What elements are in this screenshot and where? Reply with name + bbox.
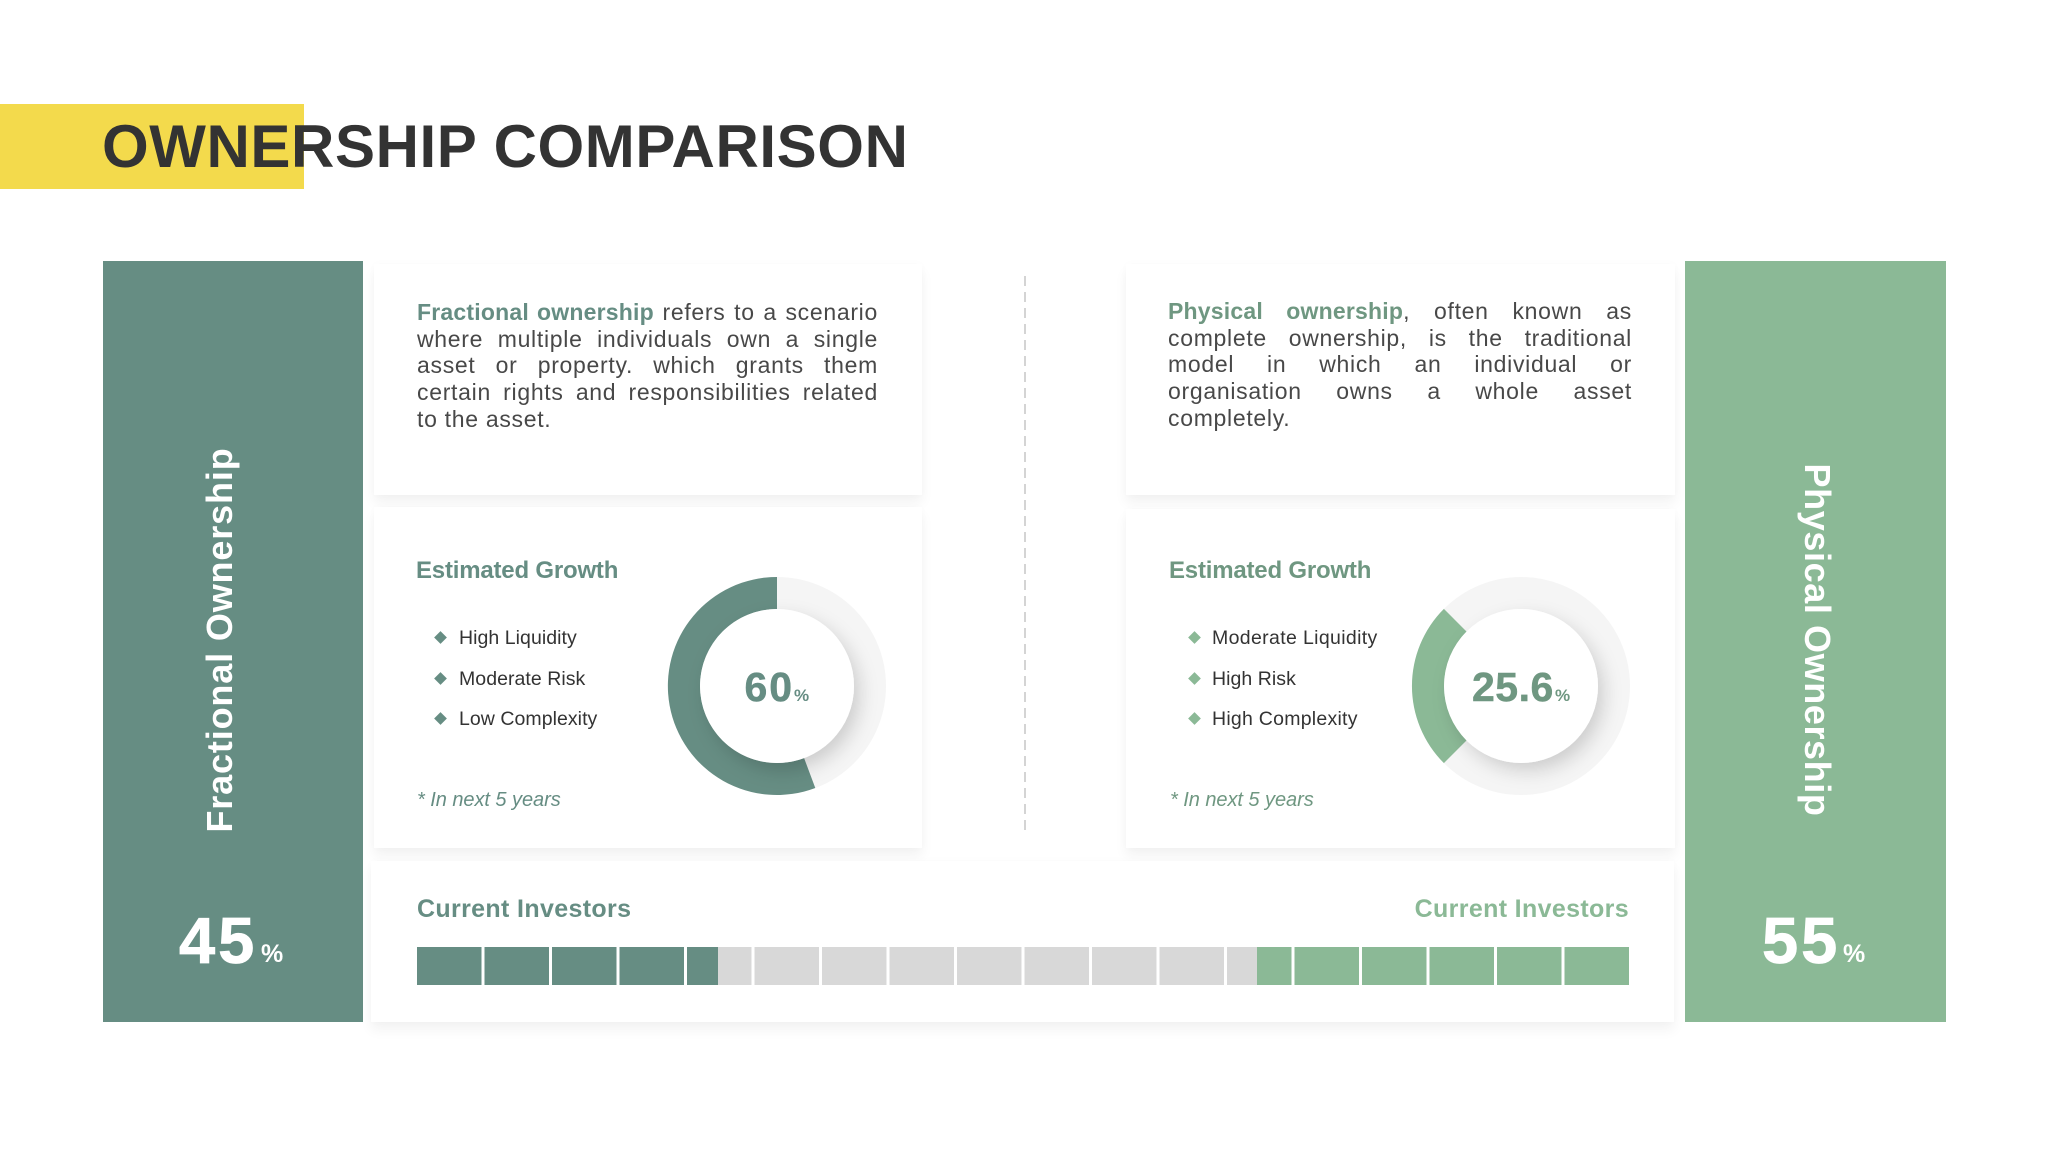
text: fractional ownership description: Fractional ownership refers to a scenario <box>417 299 878 325</box>
title: OWNERSHIP COMPARISON <box>102 113 909 180</box>
footnote: physical: * In next 5 years <box>1170 789 1314 811</box>
footnote: fractional: * In next 5 years <box>417 789 561 811</box>
bullet: high risk: High Risk <box>1212 668 1296 690</box>
panel: fractional ownership description <box>374 264 922 495</box>
list: physical attributes <box>1188 626 1378 730</box>
bullet: moderate liquidity: Moderate Liquidity <box>1212 626 1378 648</box>
text: physical ownership description: completely. <box>1168 405 1290 431</box>
text: fractional ownership description: certain rights and responsibilities related <box>417 379 878 405</box>
panel: fractional ownership side bar <box>103 261 363 1022</box>
stat: 55 percent: % <box>1843 940 1865 968</box>
fractional segments <box>417 947 718 985</box>
physical segments <box>1257 947 1629 985</box>
text: fractional ownership description: where multiple individuals own a single <box>417 326 878 352</box>
bullet: moderate risk: Moderate Risk <box>459 668 585 690</box>
donut chart: 25.6 percent: % <box>1555 686 1570 705</box>
panel: physical estimated growth <box>1126 509 1675 848</box>
vertical label: Physical Ownership: Physical Ownership <box>1797 464 1838 816</box>
text: fractional ownership description <box>417 299 878 432</box>
bullet: high complexity: High Complexity <box>1212 708 1358 730</box>
text: physical ownership description <box>1168 298 1632 431</box>
text: fractional ownership description: to the asset. <box>417 406 551 432</box>
donut chart: 60 percent <box>668 577 886 795</box>
heading: current investors physical: Current Investors <box>1415 895 1629 923</box>
text: physical ownership description: model in which an individual or <box>1168 351 1632 377</box>
panel: current investors <box>371 861 1674 1022</box>
bullet: high liquidity: High Liquidity <box>459 626 577 648</box>
heading: fractional estimated growth: Estimated Growth <box>416 557 618 584</box>
panel: fractional estimated growth <box>374 507 922 848</box>
panel: physical ownership side bar <box>1685 261 1946 1022</box>
heading: current investors fractional: Current Investors <box>417 895 631 923</box>
text: physical ownership description: complete ownership, is the traditional <box>1168 325 1632 351</box>
donut chart: 25.6 percent: 25.6 <box>1472 664 1554 710</box>
segmented bar: investor share <box>417 947 1629 985</box>
text: fractional ownership description: asset or property. which grants them <box>417 352 878 378</box>
divider: dashed centre line <box>1024 276 1026 830</box>
text: physical ownership description: organisation owns a whole asset <box>1168 378 1632 404</box>
text: physical ownership description: Physical ownership, often known as <box>1168 298 1632 324</box>
donut chart: 25.6 percent <box>1412 577 1630 795</box>
donut chart: 60 percent: 60 <box>744 664 794 710</box>
yellow title accent block <box>0 104 304 189</box>
stat: 45 percent: % <box>261 940 283 968</box>
heading: physical estimated growth: Estimated Growth <box>1169 557 1371 584</box>
panel: physical ownership description <box>1126 264 1675 495</box>
stat: 55 percent: 55 <box>1762 904 1840 977</box>
list: fractional attributes <box>434 626 598 730</box>
neutral segments <box>718 947 1257 985</box>
stat: 45 percent: 45 <box>179 904 257 977</box>
bullet: low complexity: Low Complexity <box>459 708 597 730</box>
donut chart: 60 percent: % <box>794 686 809 705</box>
vertical label: Fractional Ownership: Fractional Ownership <box>199 447 240 833</box>
